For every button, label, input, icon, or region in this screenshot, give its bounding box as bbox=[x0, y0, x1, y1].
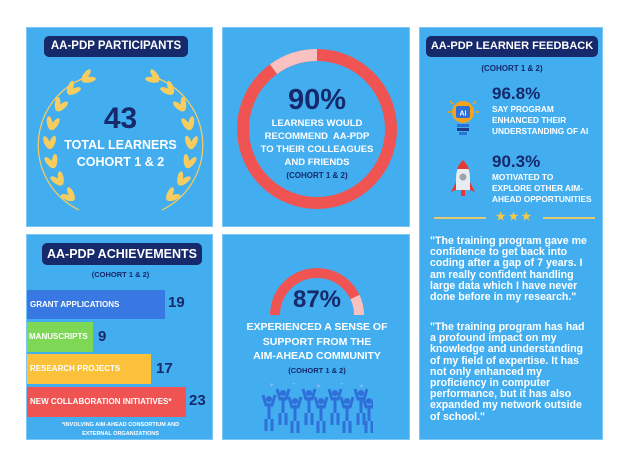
heading: learner feedback bbox=[426, 36, 598, 57]
quote 2: expanded my network outside bbox=[430, 399, 582, 411]
icon: cheering people: ✦ bbox=[269, 383, 274, 389]
quote 2: not only enhanced my bbox=[430, 366, 542, 378]
panel: recommend bbox=[222, 27, 410, 227]
heading: participants: AA-PDP PARTICIPANTS bbox=[51, 40, 181, 52]
bar: manuscripts: 9 bbox=[98, 328, 106, 345]
quote 2: of my field of expertise. It has bbox=[430, 355, 579, 367]
stat: 90%: LEARNERS WOULD bbox=[272, 118, 362, 129]
stat: 90.3%: MOTIVATED TO bbox=[492, 172, 553, 182]
panel: participants bbox=[26, 27, 213, 227]
stat: 96.8%: UNDERSTANDING OF AI bbox=[492, 126, 588, 136]
stat: 43 total learners: 43 bbox=[104, 102, 137, 135]
stat: 90%: AND FRIENDS bbox=[285, 157, 349, 168]
stat: 90.3%: AHEAD OPPORTUNITIES bbox=[492, 194, 592, 204]
stat: 87%: 87% bbox=[293, 286, 341, 313]
text: support: SUPPORT FROM THE bbox=[263, 336, 371, 348]
stat: 90%: TO THEIR COLLEAGUES bbox=[261, 144, 373, 155]
icon: rocket bbox=[451, 160, 475, 196]
panel: achievements bbox=[26, 234, 213, 440]
label: cohort: (COHORT 1 & 2) bbox=[481, 64, 543, 73]
quote 2 bbox=[430, 321, 585, 423]
bar: manuscripts: MANUSCRIPTS bbox=[29, 332, 88, 341]
quote 1: coding after a gap of 7 years. I bbox=[430, 257, 582, 269]
text: support: AIM-AHEAD COMMUNITY bbox=[253, 350, 381, 362]
footnote: EXTERNAL ORGANIZATIONS bbox=[82, 431, 159, 437]
quote 1: am really confident handling bbox=[430, 269, 574, 281]
stat: 90.3%: EXPLORE OTHER AIM- bbox=[492, 183, 583, 193]
quote 2: a profound impact on my bbox=[430, 332, 557, 344]
label: cohort: (COHORT 1 & 2) bbox=[92, 270, 149, 279]
heading: learner feedback: AA-PDP LEARNER FEEDBACK bbox=[431, 40, 593, 52]
stat: 90%: (COHORT 1 & 2) bbox=[286, 171, 348, 180]
stat: 90%: RECOMMEND AA-PDP bbox=[265, 131, 369, 142]
quote 1: "The training program gave me bbox=[430, 235, 587, 247]
stat: 96.8%: ENHANCED THEIR bbox=[492, 115, 566, 125]
quote 1: large data which I have never bbox=[430, 280, 577, 292]
bar: research projects bbox=[27, 354, 173, 384]
stat: 90.3% bbox=[492, 152, 592, 204]
heading: achievements bbox=[42, 243, 202, 265]
bar: grant applications: GRANT APPLICATIONS bbox=[30, 300, 119, 309]
label: cohort: (COHORT 1 & 2) bbox=[288, 366, 346, 375]
quote 1 bbox=[430, 235, 587, 303]
quote 2: knowledge and understanding bbox=[430, 343, 583, 355]
bar: research projects: RESEARCH PROJECTS bbox=[30, 364, 120, 373]
divider with stars: ★★★ bbox=[496, 211, 534, 223]
footnote bbox=[62, 422, 179, 437]
stat: 90.3%: 90.3% bbox=[492, 152, 540, 171]
stat: 43 total learners: COHORT 1 & 2 bbox=[77, 155, 164, 169]
icon: laurel wreath bbox=[38, 69, 204, 210]
icon: cheering people: ✦ bbox=[359, 383, 364, 390]
bar: collaborations: 23 bbox=[189, 392, 206, 409]
quote 2: performance, but it has also bbox=[430, 388, 571, 400]
stat: 43 total learners bbox=[64, 102, 177, 169]
bar: collaborations bbox=[27, 387, 206, 417]
footnote: *INVOLVING AIM-AHEAD CONSORTIUM AND bbox=[62, 422, 179, 428]
icon: AI bulb: AI bbox=[460, 110, 467, 118]
bar: grant applications bbox=[27, 290, 185, 319]
quote 1: confidence to get back into bbox=[430, 246, 567, 258]
chart: 87% gauge bbox=[270, 268, 364, 315]
icon: cheering people: ✦ bbox=[316, 383, 321, 390]
text: support: EXPERIENCED A SENSE OF bbox=[246, 321, 388, 333]
stat: 90%: 90% bbox=[288, 84, 346, 116]
quote 2: proficiency in computer bbox=[430, 377, 550, 389]
heading: participants bbox=[44, 36, 188, 57]
bar: collaborations: NEW COLLABORATION INITIATIVES* bbox=[30, 397, 171, 406]
bar: research projects: 17 bbox=[156, 360, 173, 377]
chart: 90% ring bbox=[237, 49, 397, 209]
stat: 96.8%: SAY PROGRAM bbox=[492, 104, 554, 114]
icon: cheering people bbox=[262, 383, 373, 433]
stat: 96.8% bbox=[492, 84, 588, 136]
heading: achievements: AA-PDP ACHIEVEMENTS bbox=[47, 247, 197, 261]
panel: support bbox=[222, 234, 410, 440]
quote 2: "The training program has had bbox=[430, 321, 585, 333]
stat: 43 total learners: TOTAL LEARNERS bbox=[64, 138, 177, 152]
stat: 96.8%: 96.8% bbox=[492, 84, 540, 103]
icon: AI bulb bbox=[447, 100, 479, 135]
panel: feedback bbox=[419, 27, 603, 440]
bar: grant applications: 19 bbox=[168, 294, 185, 311]
text: support bbox=[246, 321, 388, 362]
quote 1: done before in my research." bbox=[430, 291, 576, 303]
stat: 90% bbox=[260, 84, 373, 180]
bar: manuscripts bbox=[27, 322, 106, 352]
quote 2: of school." bbox=[430, 411, 485, 423]
